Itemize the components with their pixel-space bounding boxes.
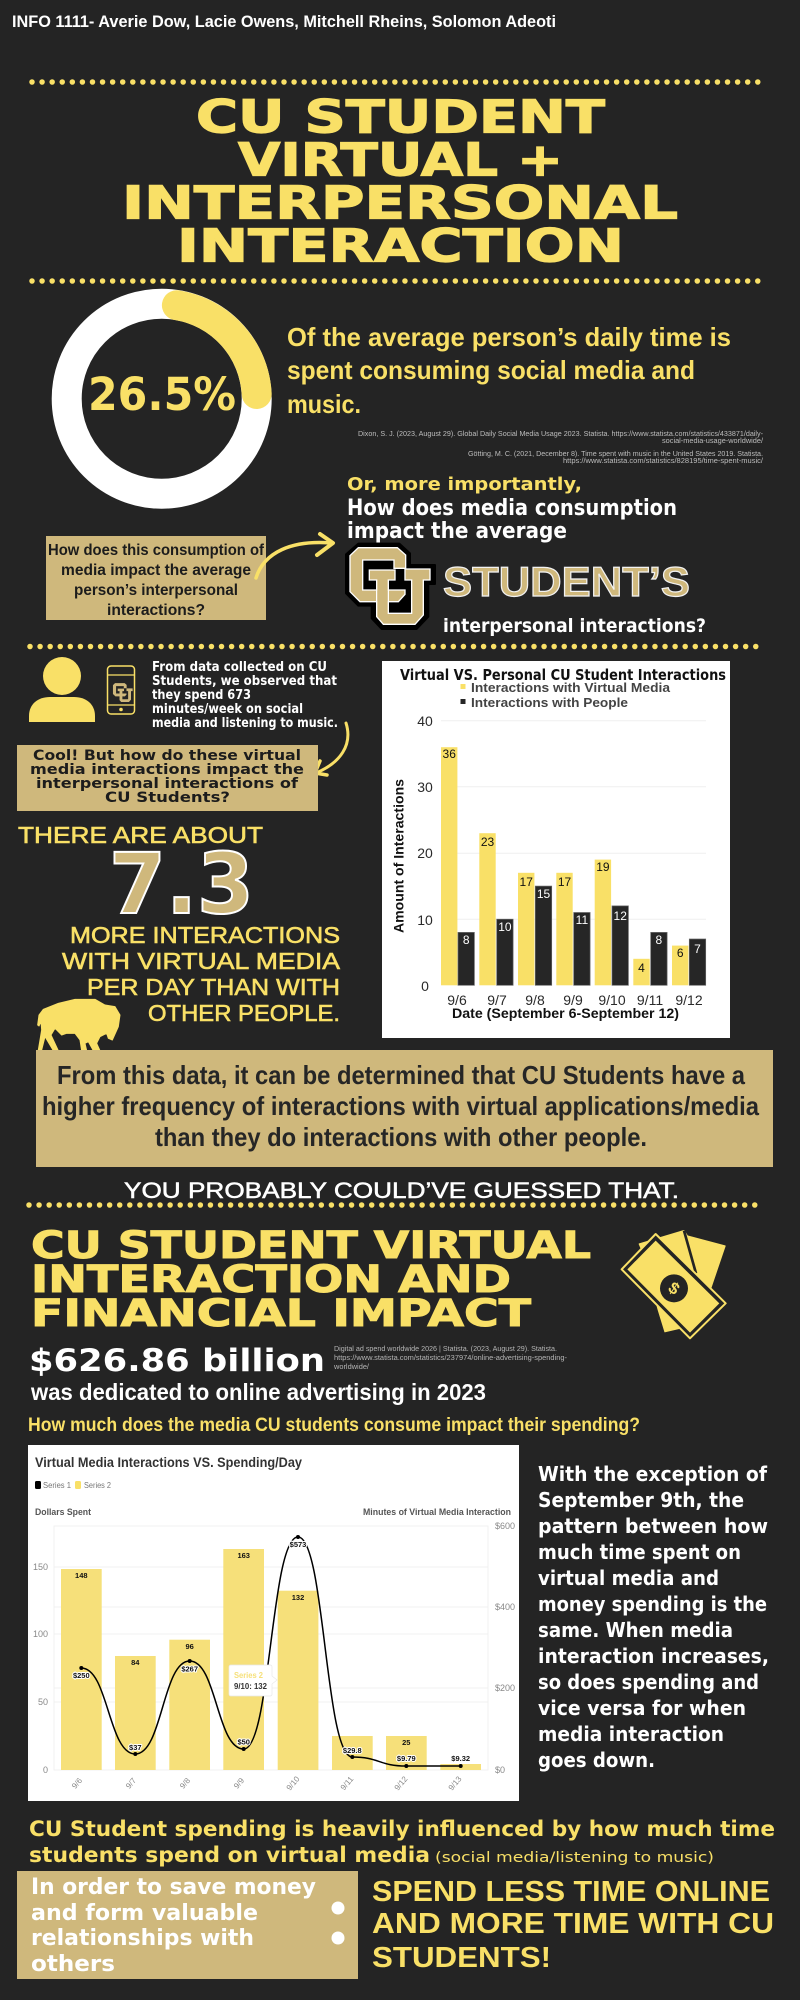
line value labels: $573 bbox=[290, 1540, 306, 1549]
y axis: 30 bbox=[417, 779, 433, 795]
chart legend: Interactions with Virtual Media bbox=[471, 680, 671, 695]
question: spending: How much does the media CU students consume impact their spending? bbox=[28, 1415, 640, 1436]
line value labels: $29.8 bbox=[343, 1746, 362, 1755]
conclusion box: From this data, it can be determined that CU Students have a bbox=[57, 1060, 745, 1090]
x axis: 9/11 bbox=[637, 992, 663, 1008]
line value labels: $37 bbox=[129, 1743, 142, 1752]
bar value labels: 36 bbox=[443, 747, 456, 761]
text: data collected: media and listening to music. bbox=[152, 715, 338, 731]
y axis bbox=[392, 713, 433, 994]
bar value labels: 96 bbox=[186, 1642, 194, 1651]
callout box: consumption question bbox=[46, 536, 266, 620]
bar value labels: 84 bbox=[131, 1658, 140, 1667]
x axis labels: 9/13 bbox=[447, 1774, 464, 1792]
heading: financial impact: CU STUDENT VIRTUAL bbox=[31, 1224, 591, 1267]
citation: ad spend bbox=[333, 1346, 568, 1371]
bar value labels: 4 bbox=[638, 961, 645, 975]
citation: ad spend: https://www.statista.com/statistics/237974/online-advertising-spending- bbox=[334, 1355, 568, 1362]
tooltip: Series 2 bbox=[234, 1671, 264, 1680]
donut chart: 26.5% bbox=[67, 304, 257, 494]
line value labels: $250 bbox=[73, 1671, 90, 1680]
right axis ticks: $200 bbox=[495, 1683, 515, 1693]
bar value labels: 6 bbox=[677, 946, 684, 960]
line value labels: $9.79 bbox=[397, 1754, 416, 1763]
x axis bbox=[447, 992, 703, 1021]
callout box: save money: In order to save money bbox=[31, 1875, 316, 1900]
stat lead-in: THERE ARE ABOUT bbox=[18, 822, 263, 848]
bar value labels: 163 bbox=[237, 1551, 250, 1560]
icon: phone with CU logo bbox=[108, 666, 134, 714]
callout box: cool question bbox=[17, 745, 318, 811]
statement: spending influence: CU Student spending is heavily influenced by how much time bbox=[29, 1817, 775, 1841]
bar value labels: 8 bbox=[656, 933, 663, 947]
bar value labels: 17 bbox=[520, 875, 533, 889]
logo: CU bbox=[346, 544, 435, 629]
left axis ticks: 100 bbox=[33, 1629, 48, 1639]
x axis labels: 9/6 bbox=[70, 1776, 84, 1791]
paragraph: pattern analysis: virtual media and bbox=[538, 1566, 719, 1590]
callout box: consumption question: media impact the average bbox=[61, 562, 251, 579]
citation: ad spend: Digital ad spend worldwide 2026 | Statista. (2023, August 29). Statista. bbox=[334, 1346, 557, 1353]
x axis labels: 9/8 bbox=[178, 1776, 192, 1791]
citations bbox=[358, 431, 764, 465]
title: CU STUDENT bbox=[196, 90, 605, 144]
author credits: INFO 1111- Averie Dow, Lacie Owens, Mitchell Rheins, Solomon Adeoti bbox=[12, 12, 556, 31]
text: data collected bbox=[152, 659, 338, 731]
bar value labels: 12 bbox=[614, 909, 627, 923]
citations: https://www.statista.com/statistics/828195/time-spent-music/ bbox=[563, 458, 763, 465]
call to action: AND MORE TIME WITH CU bbox=[372, 1908, 774, 1940]
bar value labels: 17 bbox=[558, 875, 571, 889]
callout box: save money: relationships with bbox=[31, 1926, 254, 1951]
paragraph: pattern analysis: vice versa for when bbox=[538, 1696, 746, 1720]
conclusion box: than they do interactions with other people. bbox=[155, 1122, 647, 1152]
x axis: Date (September 6-September 12) bbox=[452, 1005, 679, 1021]
bar value labels: 23 bbox=[481, 835, 494, 849]
big stat: 7.3: 7.3 bbox=[109, 835, 254, 933]
paragraph: pattern analysis: same. When media bbox=[538, 1618, 733, 1642]
donut chart: 26.5%: 26.5% bbox=[88, 368, 236, 421]
icon: money: $ bbox=[665, 1278, 684, 1299]
bar value labels: 132 bbox=[292, 1593, 304, 1602]
heading: financial impact bbox=[31, 1224, 591, 1335]
statement: daily time bbox=[287, 322, 731, 419]
callout box: cool question: interpersonal interactions of bbox=[36, 776, 299, 792]
y axis: 20 bbox=[417, 845, 433, 861]
paragraph: pattern analysis bbox=[538, 1462, 769, 1772]
paragraph: pattern analysis: so does spending and bbox=[538, 1670, 759, 1694]
icon: buffalo bbox=[38, 999, 120, 1051]
statement: spending influence bbox=[29, 1817, 775, 1867]
arrow: text to box bbox=[315, 723, 348, 775]
chart legend bbox=[460, 680, 671, 710]
y axis: Amount of Interactions bbox=[392, 779, 406, 933]
statement: daily time: spent consuming social media and bbox=[287, 355, 695, 385]
conclusion box bbox=[36, 1050, 773, 1167]
callout box: save money: others bbox=[31, 1952, 115, 1977]
callout box: save money bbox=[17, 1871, 358, 1979]
bar value labels: 25 bbox=[402, 1738, 410, 1747]
heading: financial impact: FINANCIAL IMPACT bbox=[31, 1292, 532, 1335]
citations: Dixon, S. J. (2023, August 29). Global Daily Social Media Usage 2023. Statista. https://www.statista.com/statistics/433871/daily- bbox=[358, 431, 764, 438]
line: dollars spent bbox=[79, 1535, 463, 1768]
left axis ticks bbox=[33, 1562, 48, 1775]
bars: minutes bbox=[61, 1549, 481, 1770]
heading: financial impact: INTERACTION AND bbox=[31, 1258, 511, 1301]
bar value labels: 148 bbox=[75, 1571, 88, 1580]
line value labels: $267 bbox=[181, 1664, 198, 1674]
bar value labels: 10 bbox=[498, 920, 512, 934]
x axis: 9/12 bbox=[675, 992, 703, 1008]
remark: guessed: YOU PROBABLY COULD’VE GUESSED THAT. bbox=[124, 1178, 679, 1203]
combo chart: media interactions vs spending bbox=[28, 1445, 519, 1801]
stat: ad spend: $626.86 billion bbox=[29, 1343, 325, 1379]
chart legend: Series 1 bbox=[43, 1481, 72, 1490]
bar value labels: 7 bbox=[694, 942, 701, 956]
line value labels bbox=[73, 1540, 470, 1763]
question ending: interpersonal interactions? bbox=[443, 615, 706, 637]
wordmark: STUDENT'S: STUDENT’S bbox=[443, 558, 690, 605]
chart title: Virtual Media Interactions VS. Spending/Day bbox=[35, 1454, 302, 1470]
x axis: 9/6 bbox=[447, 992, 467, 1008]
axis titles: Minutes of Virtual Media Interaction bbox=[363, 1507, 511, 1517]
text: online advertising: was dedicated to online advertising in 2023 bbox=[30, 1379, 486, 1405]
question: media consumption bbox=[347, 496, 677, 544]
stat description: MORE INTERACTIONS bbox=[70, 922, 340, 948]
subheading: or more importantly: Or, more importantly, bbox=[347, 474, 582, 495]
y axis: 0 bbox=[421, 978, 429, 994]
text: data collected: minutes/week on social bbox=[152, 701, 303, 717]
chart title: Virtual VS. Personal CU Student Interactions bbox=[400, 666, 726, 684]
x axis labels: 9/9 bbox=[232, 1776, 246, 1791]
citations: Götting, M. C. (2021, December 8). Time spent with music in the United States 2019. Statista. bbox=[468, 451, 763, 458]
bar value labels bbox=[443, 747, 701, 975]
stat description: PER DAY THAN WITH bbox=[87, 974, 340, 1000]
statement: daily time: Of the average person’s daily time is bbox=[287, 322, 731, 352]
callout box: consumption question: interactions? bbox=[107, 602, 205, 619]
callout box: cool question: CU Students? bbox=[105, 790, 230, 806]
bar value labels: 15 bbox=[537, 887, 550, 901]
paragraph: pattern analysis: interaction increases, bbox=[538, 1644, 769, 1668]
left axis ticks: 50 bbox=[38, 1697, 48, 1707]
bar value labels: 19 bbox=[596, 860, 610, 874]
text: data collected: Students, we observed that bbox=[152, 673, 337, 689]
question: media consumption: impact the average bbox=[347, 519, 567, 544]
line value labels: $9.32 bbox=[451, 1754, 470, 1763]
axis titles: Dollars Spent bbox=[35, 1507, 91, 1517]
call to action: SPEND LESS TIME ONLINE bbox=[372, 1876, 770, 1908]
chart legend bbox=[35, 1481, 111, 1490]
right axis ticks: $400 bbox=[495, 1602, 515, 1612]
arrow: box to question bbox=[256, 534, 333, 578]
chart legend: Interactions with People bbox=[471, 695, 628, 710]
callout box: consumption question: person’s interpersonal bbox=[74, 582, 238, 599]
citation: ad spend: worldwide/ bbox=[333, 1364, 369, 1371]
tooltip: 9/10: 132 bbox=[234, 1682, 268, 1691]
x axis: 9/8 bbox=[525, 992, 545, 1008]
x axis labels: 9/12 bbox=[393, 1774, 410, 1792]
y axis: 40 bbox=[417, 713, 433, 729]
chart legend: Series 2 bbox=[84, 1481, 111, 1490]
x axis: 9/9 bbox=[563, 992, 583, 1008]
left axis ticks: 0 bbox=[43, 1765, 48, 1775]
callout box: cool question: media interactions impact the bbox=[30, 762, 304, 778]
bars: people bbox=[458, 886, 706, 985]
statement: spending influence: (social media/listening to music) bbox=[435, 1850, 714, 1866]
stat description: OTHER PEOPLE. bbox=[148, 1000, 340, 1026]
paragraph: pattern analysis: much time spent on bbox=[538, 1540, 741, 1564]
callout box: save money: and form valuable bbox=[31, 1901, 258, 1926]
x axis labels: 9/10 bbox=[285, 1774, 302, 1792]
icon: money bbox=[622, 1231, 726, 1338]
paragraph: pattern analysis: goes down. bbox=[538, 1748, 655, 1772]
stat description bbox=[62, 922, 341, 1026]
bar chart: virtual vs personal interactions bbox=[382, 661, 730, 1038]
y axis: 10 bbox=[417, 912, 433, 928]
x axis: 9/7 bbox=[487, 992, 507, 1008]
statement: spending influence: students spend on virtual media bbox=[29, 1843, 430, 1867]
paragraph: pattern analysis: With the exception of bbox=[538, 1462, 767, 1486]
bars: virtual media bbox=[441, 747, 688, 985]
bar value labels: 8 bbox=[463, 933, 470, 947]
title: INTERPERSONAL bbox=[122, 176, 678, 230]
right axis ticks: $600 bbox=[495, 1521, 515, 1531]
x axis labels bbox=[70, 1774, 464, 1792]
axis titles bbox=[35, 1507, 511, 1517]
right axis ticks: $0 bbox=[495, 1765, 505, 1775]
paragraph: pattern analysis: pattern between how bbox=[538, 1514, 768, 1538]
x axis labels: 9/7 bbox=[124, 1776, 138, 1791]
call to action: STUDENTS! bbox=[372, 1942, 551, 1974]
title: INTERACTION bbox=[177, 220, 624, 272]
x axis labels: 9/11 bbox=[339, 1774, 356, 1792]
tooltip bbox=[229, 1665, 277, 1696]
callout box: consumption question: How does this consumption of bbox=[48, 542, 265, 559]
paragraph: pattern analysis: media interaction bbox=[538, 1722, 724, 1746]
statement: daily time: music. bbox=[287, 389, 361, 419]
call to action bbox=[372, 1876, 774, 1974]
citations: social-media-usage-worldwide/ bbox=[662, 438, 763, 445]
icon: person bbox=[29, 657, 95, 722]
title bbox=[122, 90, 678, 272]
right axis ticks bbox=[495, 1521, 515, 1775]
left axis ticks: 150 bbox=[33, 1562, 48, 1572]
callout box: cool question: Cool! But how do these virtual bbox=[33, 748, 301, 764]
text: data collected: From data collected on CU bbox=[152, 659, 327, 675]
bar value labels: 11 bbox=[576, 913, 588, 927]
paragraph: pattern analysis: September 9th, the bbox=[538, 1488, 744, 1512]
title: VIRTUAL + bbox=[238, 134, 563, 186]
stat description: WITH VIRTUAL MEDIA bbox=[62, 948, 341, 974]
paragraph: pattern analysis: money spending is the bbox=[538, 1592, 767, 1616]
x axis: 9/10 bbox=[598, 992, 626, 1008]
line value labels: $50 bbox=[237, 1738, 250, 1746]
bar value labels bbox=[75, 1551, 410, 1747]
text: data collected: they spend 673 bbox=[152, 687, 251, 703]
question: media consumption: How does media consumption bbox=[347, 496, 677, 521]
